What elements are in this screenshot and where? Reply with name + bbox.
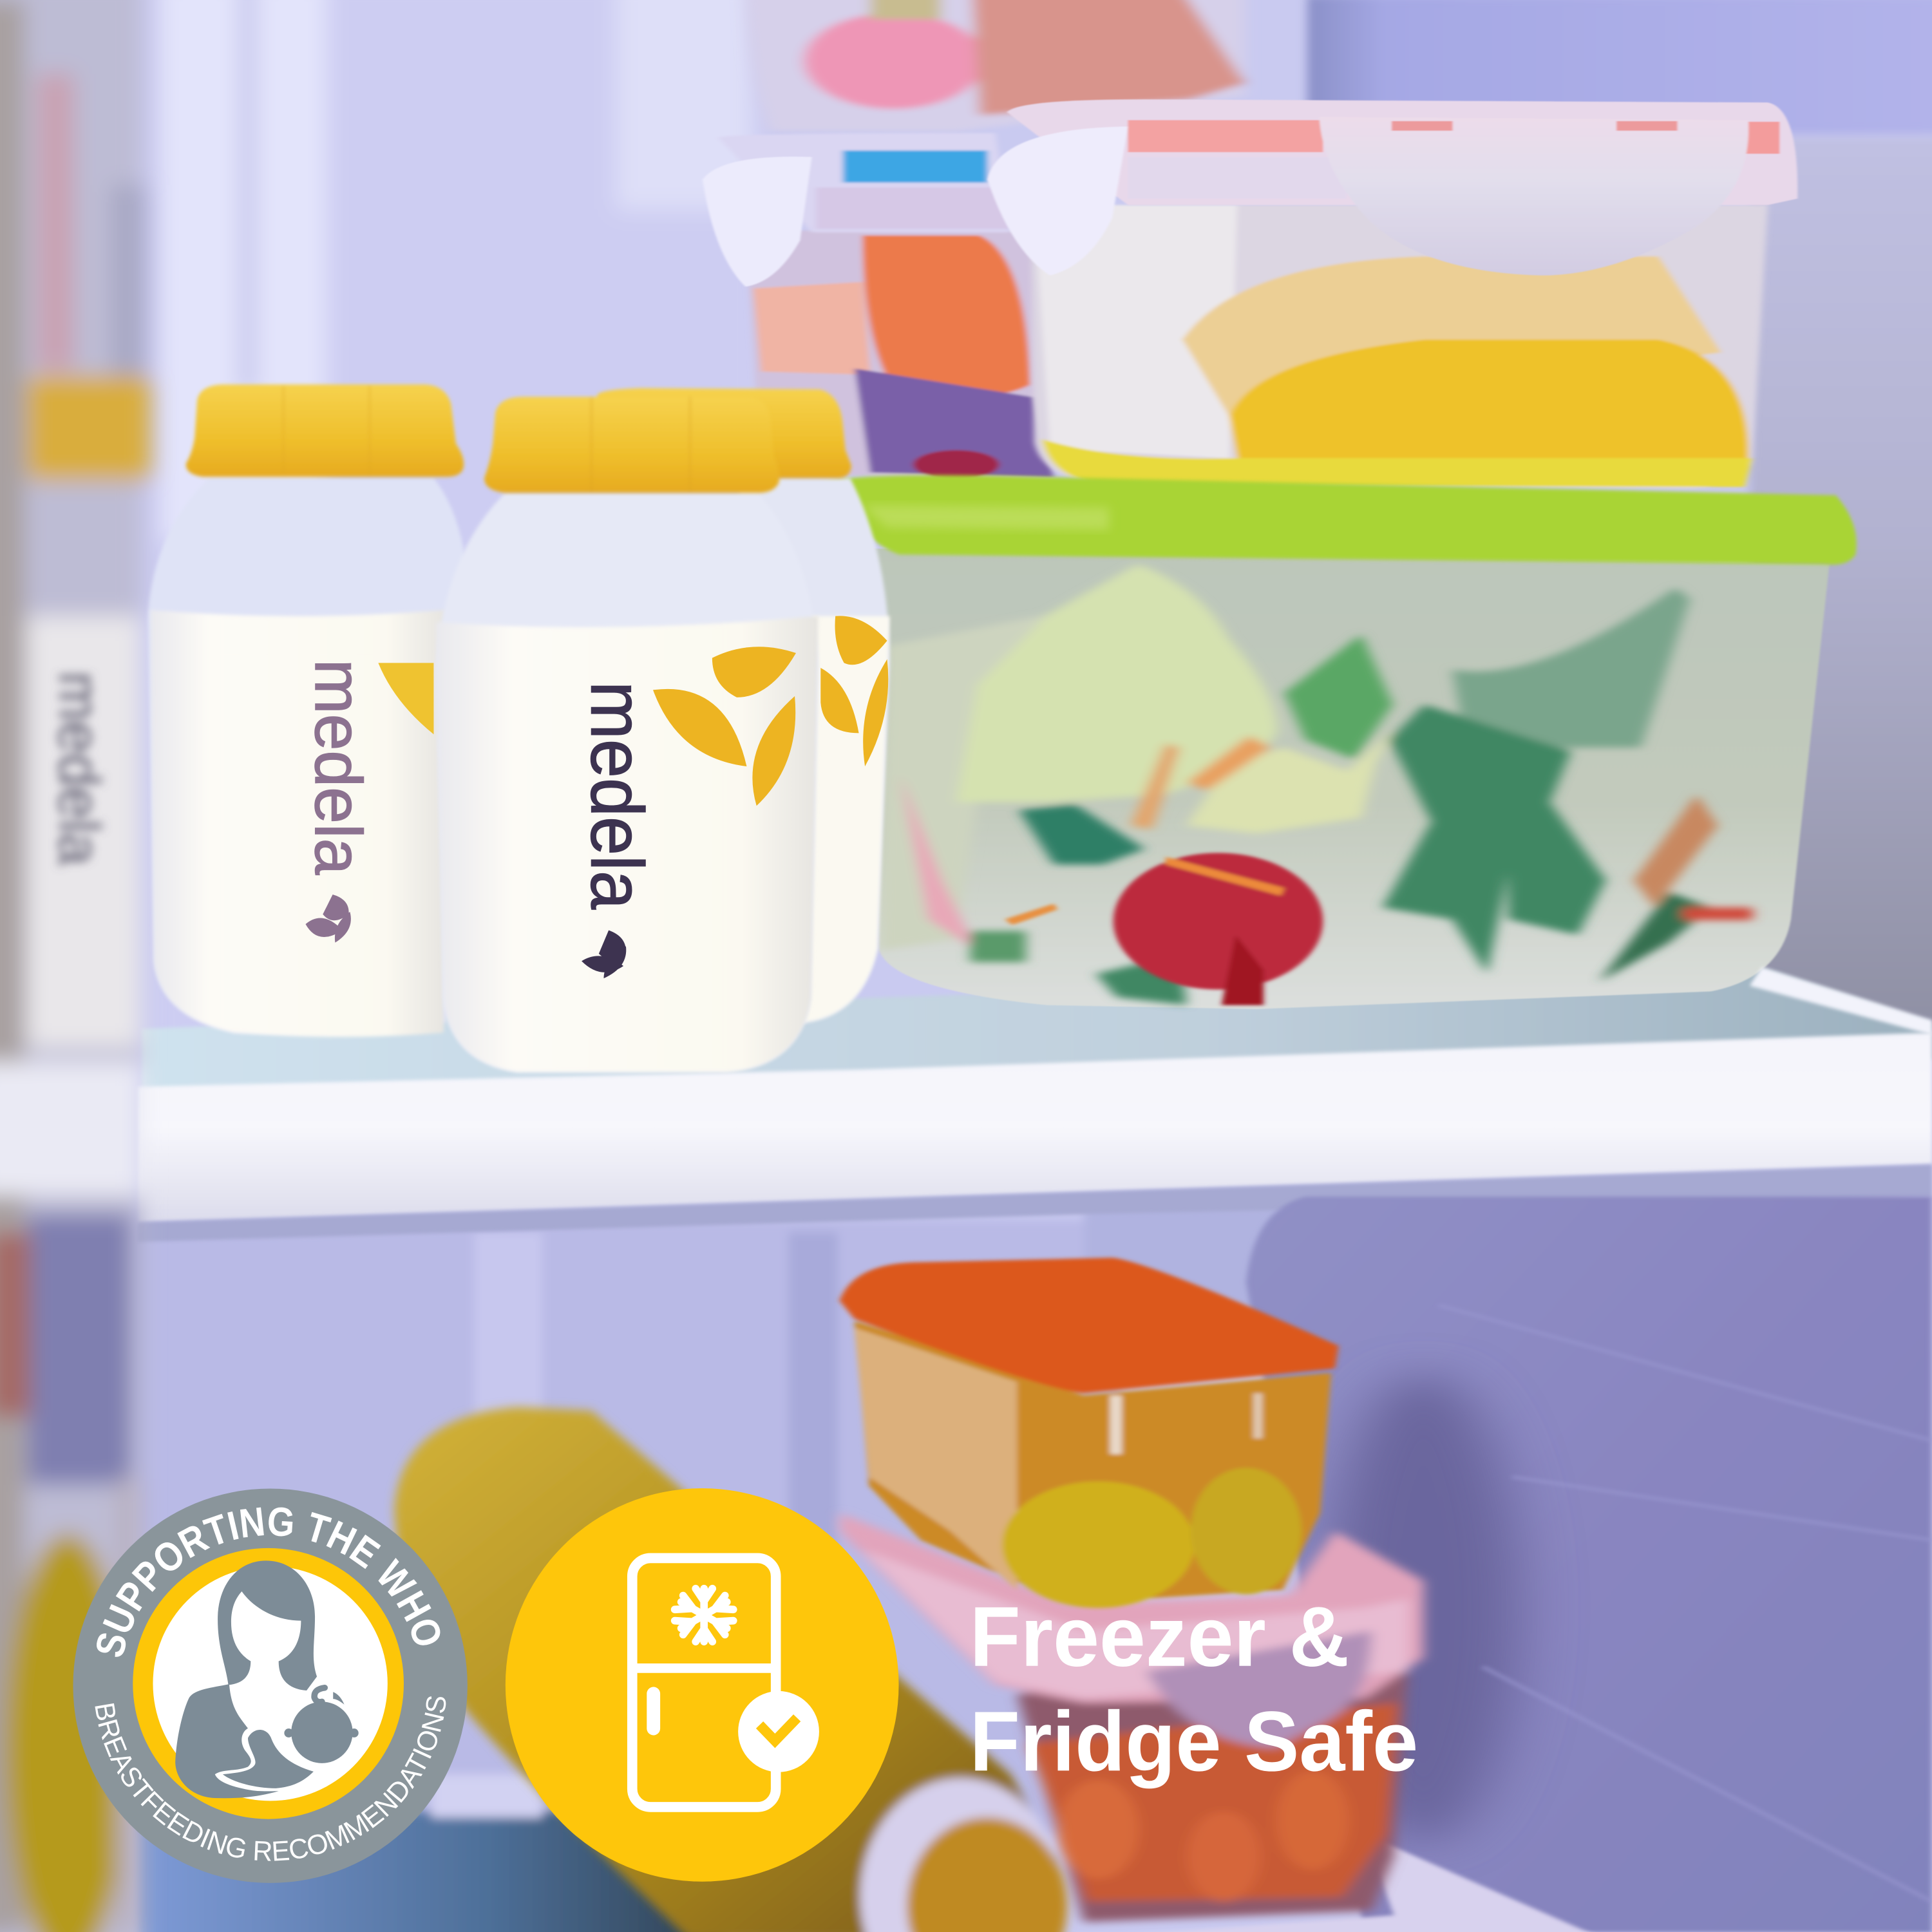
- pink lid container: [987, 99, 1797, 489]
- bottle: back: [591, 388, 889, 1023]
- icon: mother and baby: [175, 1560, 359, 1798]
- top fruit container: [746, 0, 1245, 131]
- left blurred door and bottle: [0, 0, 150, 1932]
- wall shadow: [1327, 1373, 1520, 1843]
- cap: [591, 388, 851, 478]
- icon: fridge handle: [647, 1687, 660, 1735]
- shelf glass: [142, 967, 1932, 1097]
- yellow leaf mark: [653, 647, 796, 806]
- salad tub and contents: [866, 549, 1830, 1009]
- lower back wall: [135, 1201, 1282, 1836]
- medela wordmark: medela: [301, 659, 376, 875]
- green lid container with salad: [823, 475, 1857, 1009]
- bottom right shelf: [1083, 1834, 1601, 1932]
- small logo: [582, 931, 626, 978]
- blurred medela label on left bottle: medela: [46, 672, 112, 866]
- icon: snowflake: [675, 1589, 734, 1642]
- lower shelf: yellow lying bottle: [394, 1407, 1067, 1932]
- upper right wall band: [1307, 0, 1932, 135]
- curved subheading: BREASTFEEDING RECOMMENDATIONS: [95, 1696, 446, 1861]
- icon: check badge: [738, 1691, 819, 1772]
- upper back wall: [148, 0, 764, 1084]
- bottle: left: [148, 384, 469, 1037]
- green lid: [823, 475, 1857, 565]
- medela wordmark: medela: [575, 681, 658, 909]
- bottle: front: [436, 397, 818, 1072]
- shelf rail: [138, 967, 1932, 1242]
- headline: freezer and fridge safe: Fridge Safe: [970, 1693, 1418, 1788]
- bottle cap: [860, 1778, 1062, 1932]
- headline: freezer and fridge safe: Freezer &: [970, 1589, 1349, 1684]
- lower right wall: [1246, 1197, 1932, 1932]
- upper right wall: [1750, 138, 1932, 1025]
- cap: [186, 384, 464, 477]
- orange lid box: [840, 1258, 1338, 1608]
- icon: fridge outline: [632, 1558, 776, 1807]
- yellow circle with fridge icon: [506, 1488, 899, 1882]
- lower shelf base: [135, 1774, 727, 1932]
- cap: [484, 397, 779, 493]
- badge: supporting the WHO breastfeeding recommendations: [73, 1489, 468, 1883]
- carrots box: [840, 1513, 1423, 1922]
- curved heading: SUPPORTING THE WHO: [97, 1507, 440, 1657]
- wall lines: [1438, 1305, 1932, 1902]
- yellow leaf mark: [820, 616, 888, 766]
- blue lid container: [703, 133, 1054, 479]
- headline: freezer and fridge safe: [970, 1589, 1418, 1788]
- small logo: [305, 895, 351, 943]
- lower right wall, shelf and stacked boxes: [840, 1197, 1932, 1932]
